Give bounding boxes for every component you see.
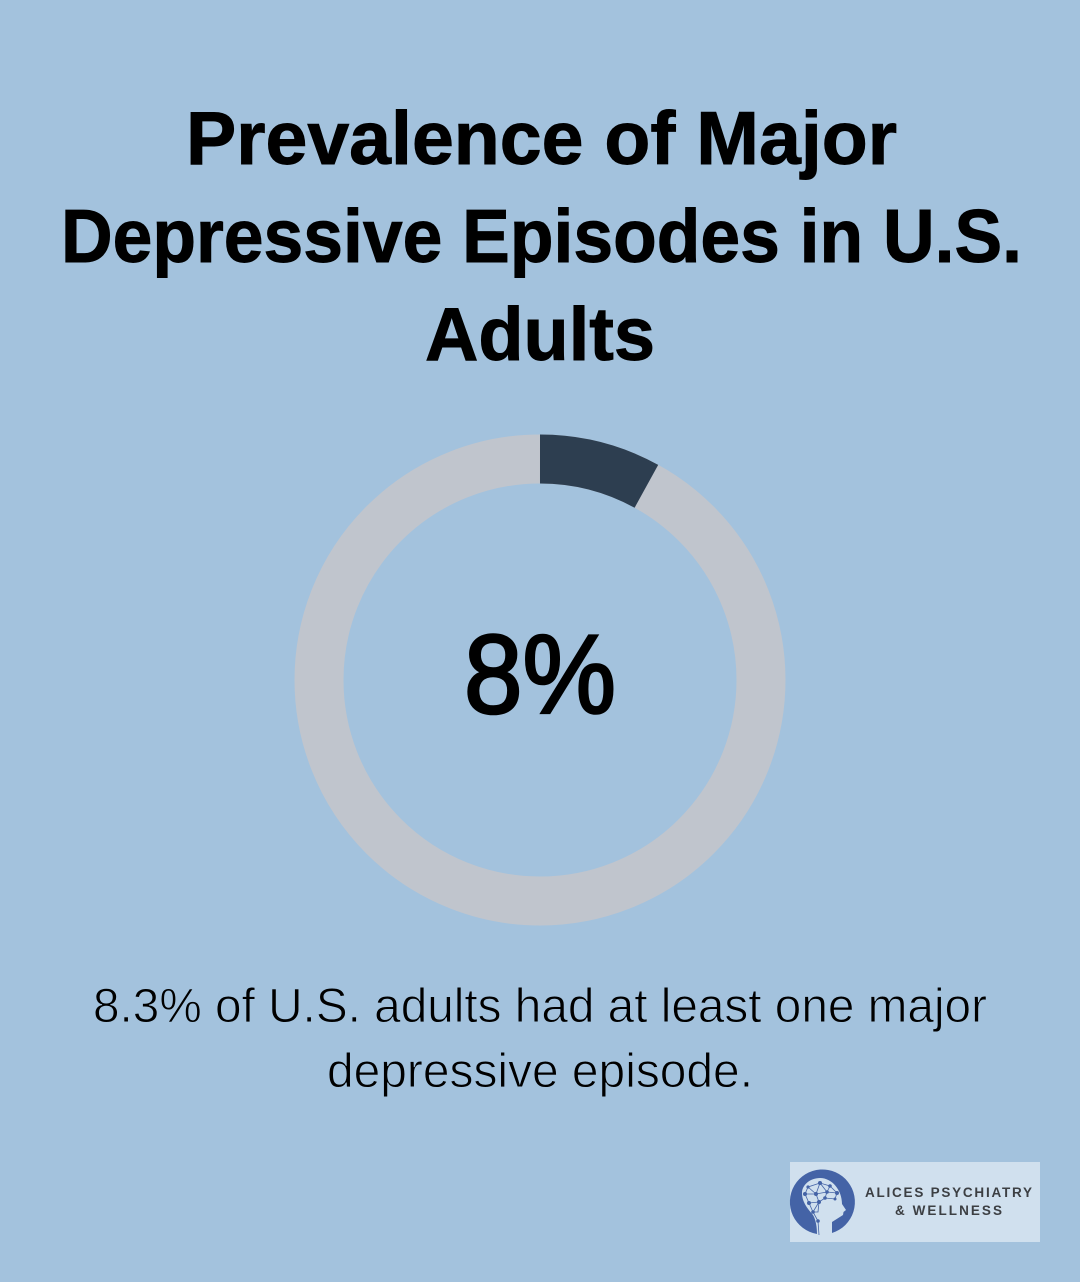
logo text: & WELLNESS	[895, 1203, 1002, 1218]
donut value: 8%	[464, 612, 616, 737]
icon: head with brain network	[790, 1169, 855, 1235]
title: Adults	[425, 292, 655, 376]
title: Prevalence of Major	[186, 96, 897, 180]
description text: depressive episode.	[327, 1045, 753, 1098]
title	[61, 96, 1022, 376]
description text	[93, 980, 987, 1098]
logo text: ALICES PSYCHIATRY	[865, 1185, 1032, 1200]
logo badge	[790, 1162, 1040, 1242]
title: Depressive Episodes in U.S.	[61, 194, 1022, 278]
description text: 8.3% of U.S. adults had at least one major	[93, 980, 987, 1033]
logo text	[865, 1185, 1032, 1218]
donut chart: 8 percent	[319, 459, 761, 901]
